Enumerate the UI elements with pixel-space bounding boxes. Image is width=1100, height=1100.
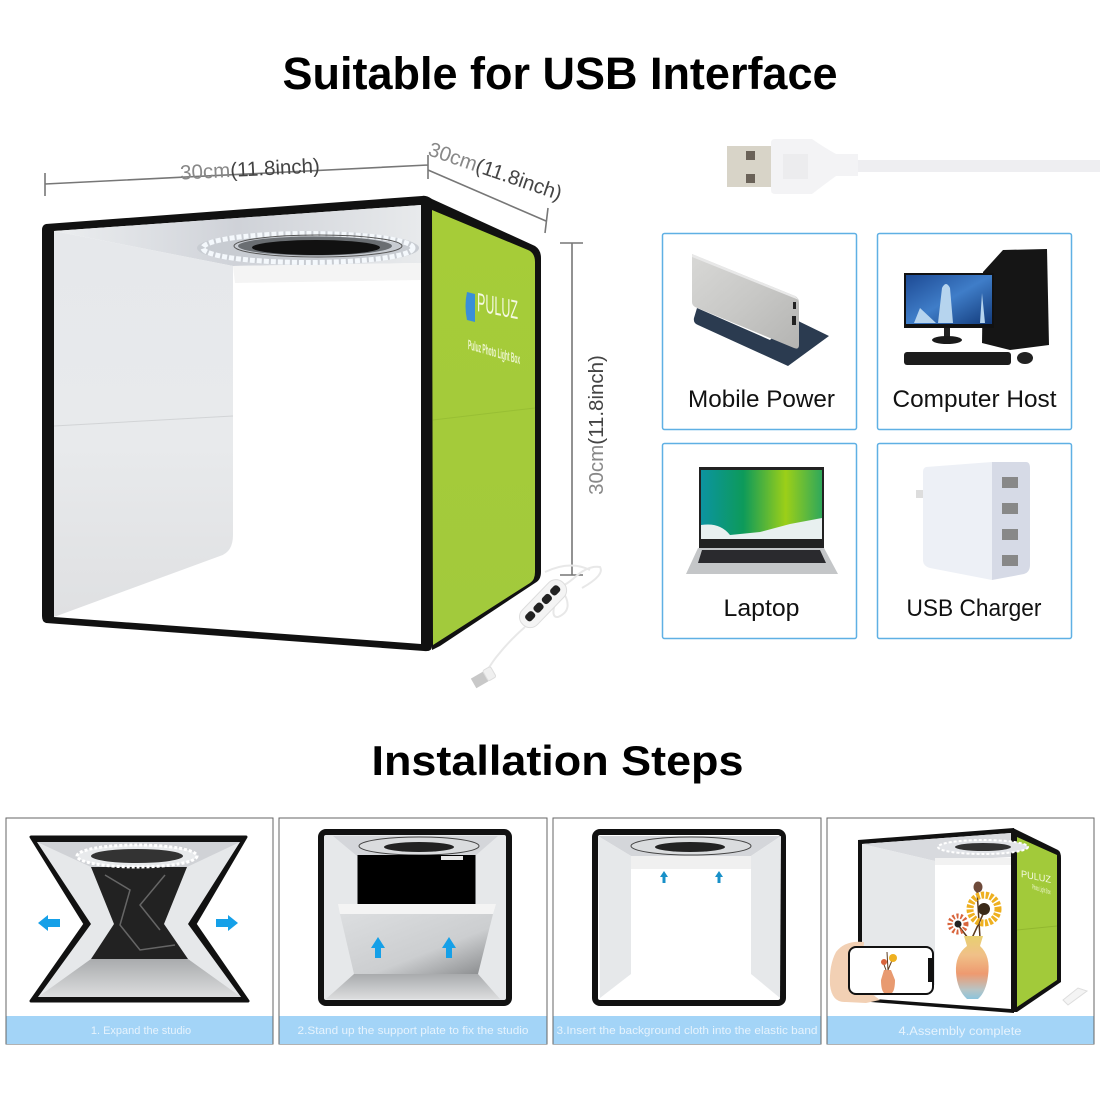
white back wall (54, 205, 421, 644)
card: Computer Host (878, 234, 1072, 430)
PULUZ logo: PULUZ (477, 288, 518, 326)
caption bar: 1. Expand the studio (91, 1025, 191, 1037)
dimmer (515, 575, 571, 632)
caption bar (828, 1016, 1094, 1044)
caption bar (280, 1016, 546, 1044)
card: USB Charger (878, 444, 1072, 638)
flowers (950, 882, 998, 938)
ceiling (54, 205, 421, 266)
panel: step 4 (827, 818, 1094, 1044)
illustration: background cloth (595, 832, 783, 1003)
strip under ceiling (233, 263, 421, 283)
dimension: height: 30cm(11.8inch) (585, 355, 608, 495)
arrow: left (38, 915, 60, 931)
left silver wall (54, 231, 233, 617)
USB cable plug (727, 139, 1100, 194)
hand (830, 942, 880, 1003)
right green side panel (422, 196, 541, 650)
icon: desktop computer (904, 249, 1049, 365)
icon: laptop (686, 467, 838, 574)
dimension: height (560, 243, 608, 575)
caption bar: 2.Stand up the support plate to fix the studio (298, 1025, 528, 1037)
title: Suitable for USB Interface: Suitable for USB Interface (282, 48, 838, 99)
panel: step 2 (279, 818, 547, 1044)
label: Laptop (724, 595, 800, 622)
dimension: depth: 30cm(11.8inch) (425, 138, 565, 205)
caption bar (554, 1016, 820, 1044)
label: USB Charger (906, 595, 1042, 622)
dimension: width (45, 154, 428, 196)
card: Mobile Power (662, 234, 856, 430)
label: Computer Host (892, 386, 1057, 413)
arrow: up right (715, 871, 723, 883)
label: Mobile Power (688, 386, 835, 413)
card: Laptop (662, 444, 856, 638)
arrow: up right (442, 937, 456, 958)
illustration: assembled studio (830, 828, 1087, 1013)
PULUZ logo (466, 288, 518, 326)
icon: power banks (692, 254, 829, 366)
LED ring light (197, 231, 419, 265)
logo: PULUZ (1021, 869, 1051, 886)
title: Installation Steps: Installation Steps (372, 737, 744, 784)
caption bar (6, 1016, 272, 1044)
phone (849, 947, 933, 994)
dimension: width: 30cm(11.8inch) (180, 154, 320, 185)
black front frame (42, 196, 432, 651)
photo light box product (42, 196, 601, 688)
vase (956, 936, 989, 999)
illustration: expand the studio (31, 837, 248, 1001)
caption bar: 3.Insert the background cloth into the elastic band (556, 1025, 818, 1037)
controller (1063, 988, 1087, 1005)
box name: Puluz Photo Light Box (468, 338, 520, 368)
USB plug (470, 666, 496, 688)
dimmer switch and USB cable (470, 565, 601, 688)
box name: Photo Light Box (1032, 884, 1051, 897)
caption bar: 4.Assembly complete (898, 1026, 1022, 1038)
icon: USB charger (916, 462, 1030, 580)
panel: step 3 (553, 818, 821, 1044)
arrow: up left (371, 937, 385, 958)
arrow: up left (660, 871, 668, 883)
panel: step 1 (6, 818, 273, 1044)
illustration: support plate (321, 832, 509, 1003)
arrow: right (216, 915, 238, 931)
